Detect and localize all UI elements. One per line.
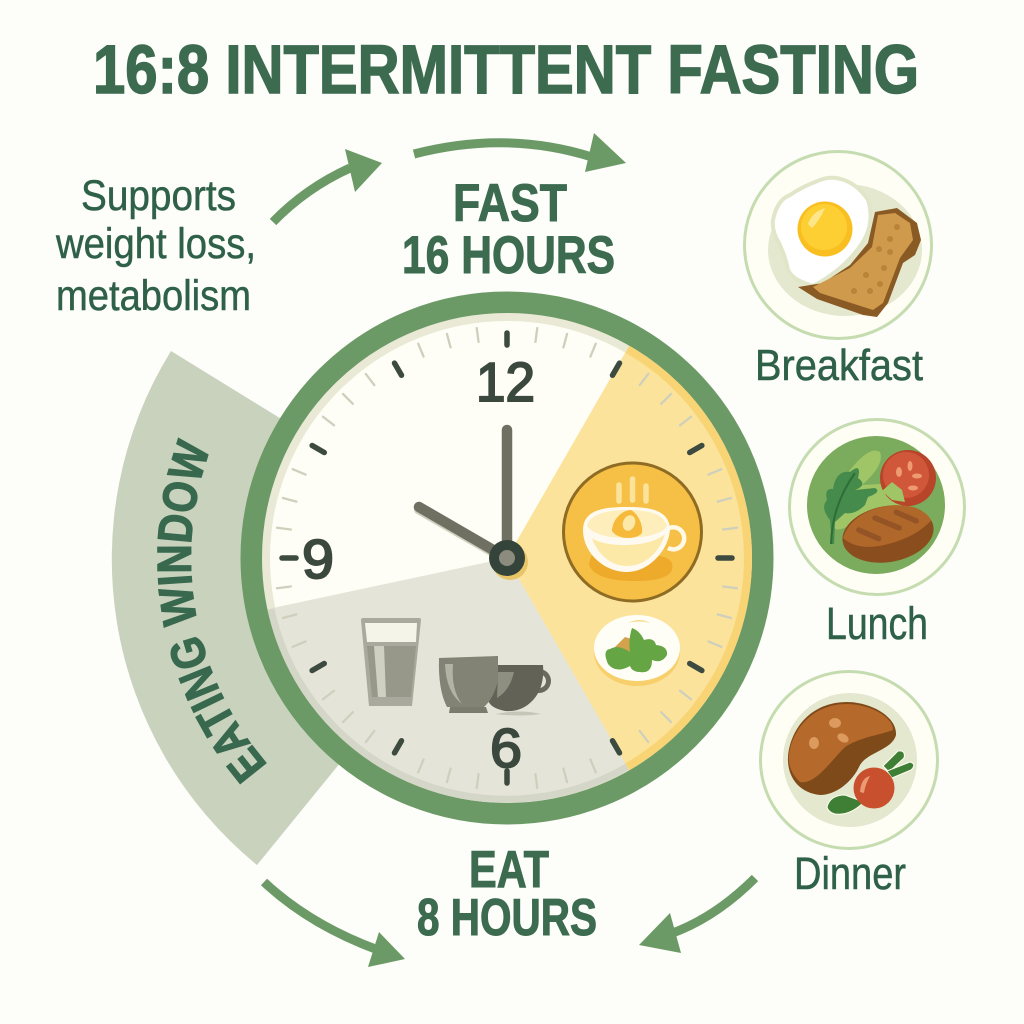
icon: coffee cup with egg xyxy=(564,463,702,601)
food: dinner plate xyxy=(760,672,938,848)
text: benefits note: weight loss, xyxy=(55,220,256,268)
icon: glass of water xyxy=(361,618,421,706)
steak xyxy=(838,498,938,570)
cherry tomato xyxy=(854,768,894,808)
icon: two dark cups xyxy=(439,656,548,716)
arugula leaf xyxy=(824,468,877,544)
arrow: from eating window to eat xyxy=(264,882,405,967)
green plate xyxy=(807,436,945,574)
yellow eating sector xyxy=(507,346,752,770)
label: lunch: Lunch xyxy=(826,598,928,649)
label: dinner: Dinner xyxy=(794,848,906,899)
clock hands xyxy=(418,430,507,560)
clock rim xyxy=(252,302,762,814)
clock xyxy=(252,302,762,814)
clock numerals: 9 xyxy=(302,528,334,590)
tomato xyxy=(880,450,936,506)
text: benefits note: Supports xyxy=(81,172,236,220)
heading: fast 16 hours: FAST xyxy=(453,174,567,233)
yellow sector edge xyxy=(628,349,748,767)
icon: salad plate xyxy=(594,615,680,686)
minor ticks xyxy=(277,328,737,788)
text: benefits note: metabolism xyxy=(56,272,251,320)
arrow: over fast label xyxy=(414,133,626,172)
text: benefits note xyxy=(55,172,256,320)
plate shadow xyxy=(768,184,922,316)
heading: fast 16 hours xyxy=(402,174,615,285)
gray fasting sector xyxy=(268,558,629,802)
gray sector edge xyxy=(271,609,628,799)
egg yolk xyxy=(798,202,852,256)
heading: eat 8 hours: EAT xyxy=(469,841,549,899)
major ticks xyxy=(282,333,732,783)
small lettuce xyxy=(882,482,905,502)
eating window band xyxy=(112,351,339,865)
toast xyxy=(798,208,921,317)
eating window label: EATING WINDOW xyxy=(157,437,267,784)
clock numerals: 12 xyxy=(476,351,535,413)
steak xyxy=(788,702,896,795)
clock face light edge xyxy=(266,317,748,799)
arrow: from dinner to eat xyxy=(639,878,755,953)
light greens xyxy=(832,450,905,530)
arrow: from benefits to fast xyxy=(273,149,382,222)
label: breakfast: Breakfast xyxy=(755,341,923,390)
garnish leaves xyxy=(827,751,914,814)
clock numerals xyxy=(302,351,535,779)
clock hub xyxy=(489,540,528,580)
food: breakfast plate xyxy=(744,152,932,338)
clock numerals: 6 xyxy=(490,717,522,779)
heading: fast 16 hours: 16 HOURS xyxy=(402,226,615,285)
fried egg xyxy=(773,178,871,286)
heading: eat 8 hours: 8 HOURS xyxy=(417,889,597,947)
food: lunch plate xyxy=(790,420,964,594)
heading: eat 8 hours xyxy=(417,841,597,947)
plate shadow xyxy=(783,693,917,827)
